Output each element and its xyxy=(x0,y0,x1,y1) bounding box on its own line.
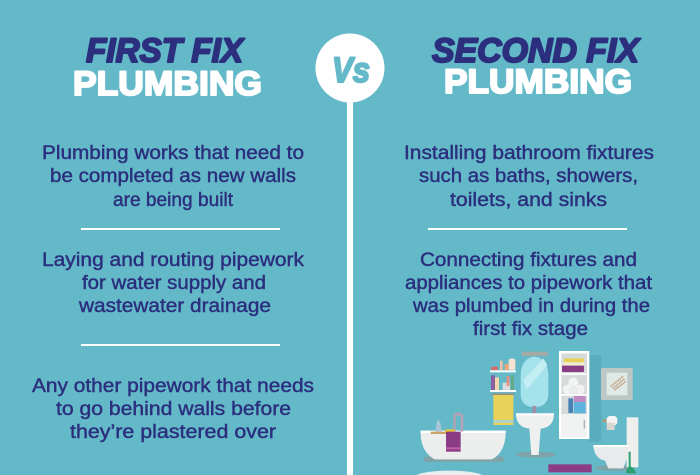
text block: second fix point 2 xyxy=(405,249,653,340)
text block: first fix point 3: Any other pipework that needs xyxy=(32,375,314,397)
heading: first fix plumbing: PLUMBING xyxy=(73,65,262,103)
heading: second fix plumbing xyxy=(432,32,641,101)
text block: second fix point 2: appliances to pipework that xyxy=(405,272,653,294)
text block: first fix point 2 xyxy=(42,249,304,317)
text block: second fix point 1: such as baths, showers, xyxy=(419,165,638,187)
text block: first fix point 3 xyxy=(32,375,314,443)
icon: wall picture xyxy=(601,368,633,400)
text block: first fix point 2: Laying and routing pipework xyxy=(42,249,304,271)
icon: plunger xyxy=(626,452,636,473)
icon: yellow towel xyxy=(492,393,514,425)
heading: second fix plumbing: SECOND FIX xyxy=(432,32,641,70)
text block: first fix point 1: Plumbing works that need to xyxy=(42,142,304,164)
center divider line xyxy=(347,95,353,475)
bathroom illustration xyxy=(414,351,638,475)
heading: first fix plumbing: FIRST FIX xyxy=(86,32,245,70)
text block: first fix point 1 xyxy=(42,142,304,211)
text block: first fix point 2: for water supply and xyxy=(82,272,266,294)
text block: second fix point 2: first fix stage xyxy=(473,318,588,340)
icon: purple rug xyxy=(548,464,592,472)
text block: second fix point 1 xyxy=(404,142,654,211)
icon: bathtub xyxy=(421,413,506,462)
vs badge xyxy=(316,34,384,102)
text block: second fix point 1: Installing bathroom fixtures xyxy=(404,142,654,164)
icon: tall cabinet xyxy=(559,351,601,442)
text block: first fix point 1: be completed as new walls xyxy=(50,165,296,187)
text block: first fix point 1: are being built xyxy=(113,189,234,211)
text block: first fix point 3: they’re plastered over xyxy=(70,421,277,443)
vs badge: Vs xyxy=(332,51,370,90)
icon: shelves with bottles xyxy=(490,359,516,392)
icon: toilet paper xyxy=(603,416,617,430)
text block: first fix point 3: to go behind walls before xyxy=(56,398,291,420)
icon: mirror xyxy=(521,352,548,407)
icon: floor mat xyxy=(414,471,484,475)
icon: pedestal sink xyxy=(516,406,555,458)
text block: first fix point 2: wastewater drainage xyxy=(78,295,271,317)
text block: second fix point 2: Connecting fixtures and xyxy=(420,249,637,271)
text block: second fix point 2: was plumbed in during the xyxy=(412,295,650,317)
heading: first fix plumbing xyxy=(73,32,262,103)
heading: second fix plumbing: PLUMBING xyxy=(444,63,632,101)
icon: toilet xyxy=(593,417,638,471)
text block: second fix point 1: toilets, and sinks xyxy=(450,189,607,211)
